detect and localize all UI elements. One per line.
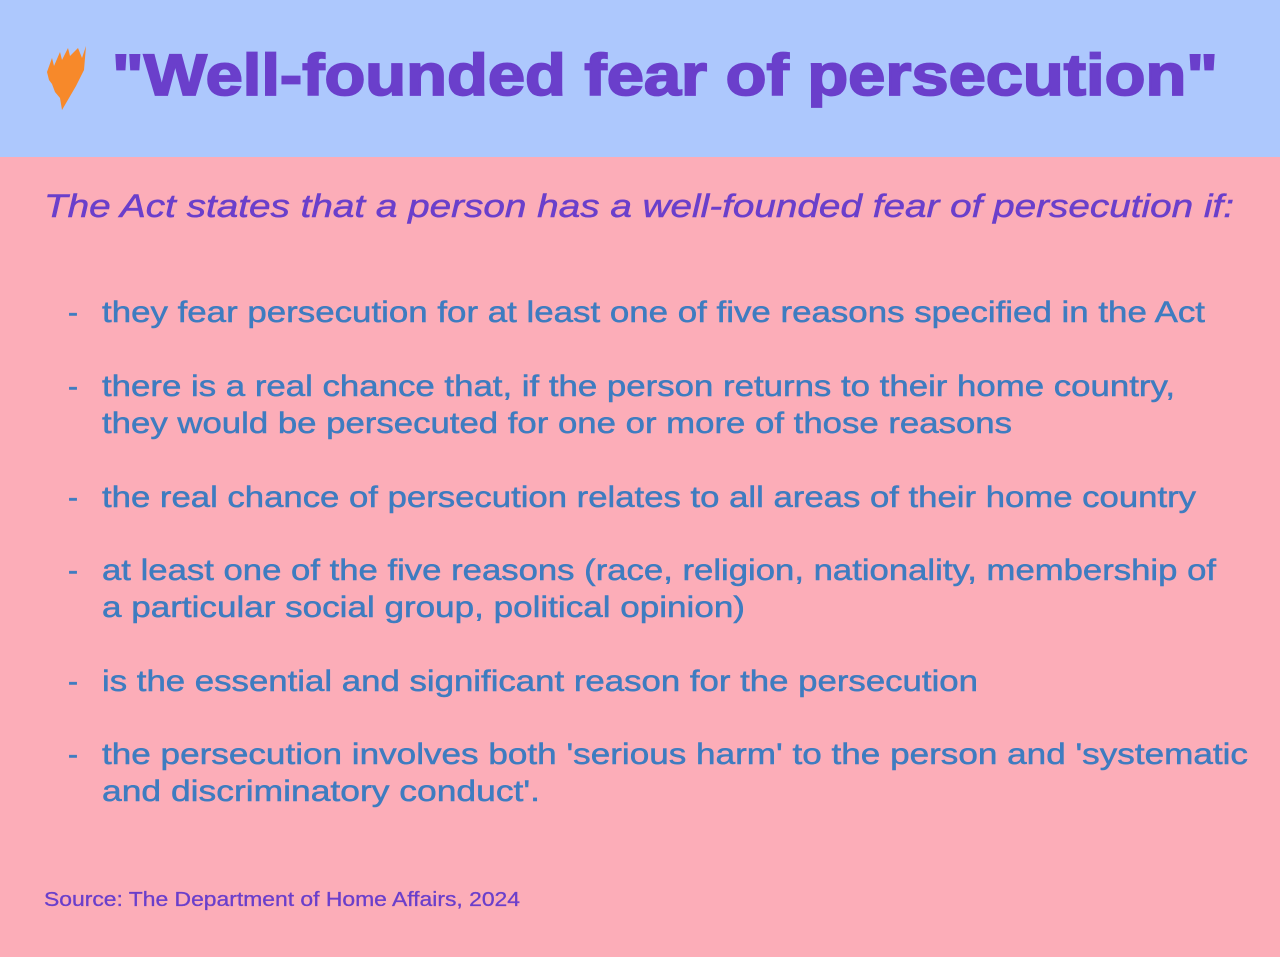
bullet list: - <box>68 481 78 514</box>
bullet list: - <box>68 554 78 587</box>
bullet list: - <box>68 370 78 403</box>
bullet list: is the essential and significant reason for the persecution <box>102 665 978 698</box>
bullet list: and discriminatory conduct'. <box>102 775 540 808</box>
bullet list: - <box>68 296 78 329</box>
bullet list: the persecution involves both 'serious harm' to the person and 'systematic <box>102 738 1248 771</box>
header band <box>0 0 1280 157</box>
title: "Well-founded fear of persecution" <box>112 43 1218 108</box>
bullet list: the real chance of persecution relates to all areas of their home country <box>102 481 1196 514</box>
bullet list: - <box>68 738 78 771</box>
subtitle: The Act states that a person has a well-founded fear of persecution if: <box>44 188 1234 224</box>
bullet list: there is a real chance that, if the person returns to their home country, <box>102 370 1175 403</box>
bullet list: at least one of the five reasons (race, religion, nationality, membership of <box>102 554 1217 587</box>
bullet list: they fear persecution for at least one of five reasons specified in the Act <box>102 296 1206 329</box>
bullet list: - <box>68 665 78 698</box>
bullet list: a particular social group, political opinion) <box>102 591 745 624</box>
source: Source: The Department of Home Affairs, 2024 <box>44 889 520 911</box>
bullet list <box>68 296 1248 808</box>
icon: logo <box>47 46 86 110</box>
bullet list: they would be persecuted for one or more of those reasons <box>102 407 1012 440</box>
